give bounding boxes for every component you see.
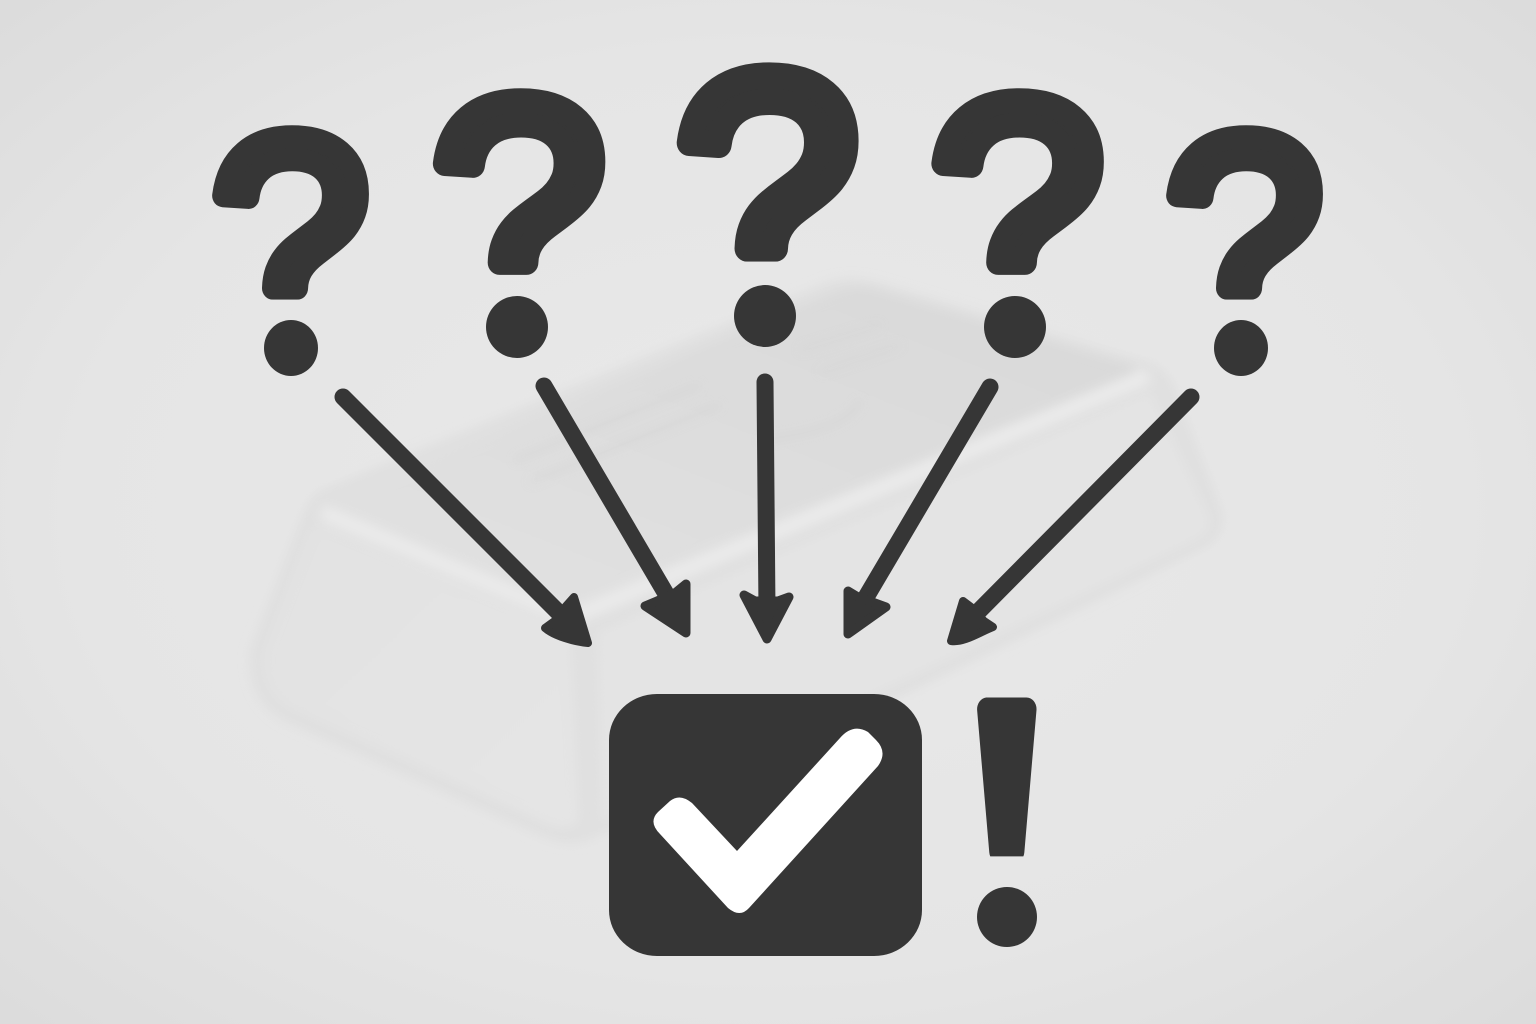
exclamation mark: ! [962, 634, 1052, 985]
arrow 5 [951, 397, 1191, 641]
question mark 5: ? [1166, 77, 1322, 406]
question mark 3: ? [676, 7, 858, 383]
arrow 2 [544, 386, 686, 633]
checkbox [609, 694, 922, 956]
bar stamped marks [515, 325, 900, 482]
check mark [653, 729, 883, 913]
bar top face [340, 288, 1136, 602]
bar right face [598, 392, 1210, 822]
question mark 4: ? [931, 36, 1103, 388]
question mark 2: ? [432, 36, 605, 388]
question mark 1: ? [212, 77, 368, 406]
bar silhouette [249, 278, 1223, 843]
bar front face [264, 525, 578, 827]
bar highlight edges [322, 376, 1148, 618]
arrow 3 [744, 382, 789, 639]
faded silver bar [249, 278, 1223, 843]
checkbox square [609, 694, 922, 956]
arrow 1 [343, 397, 588, 643]
exclamation mark [977, 698, 1037, 947]
arrow 4 [848, 387, 990, 634]
